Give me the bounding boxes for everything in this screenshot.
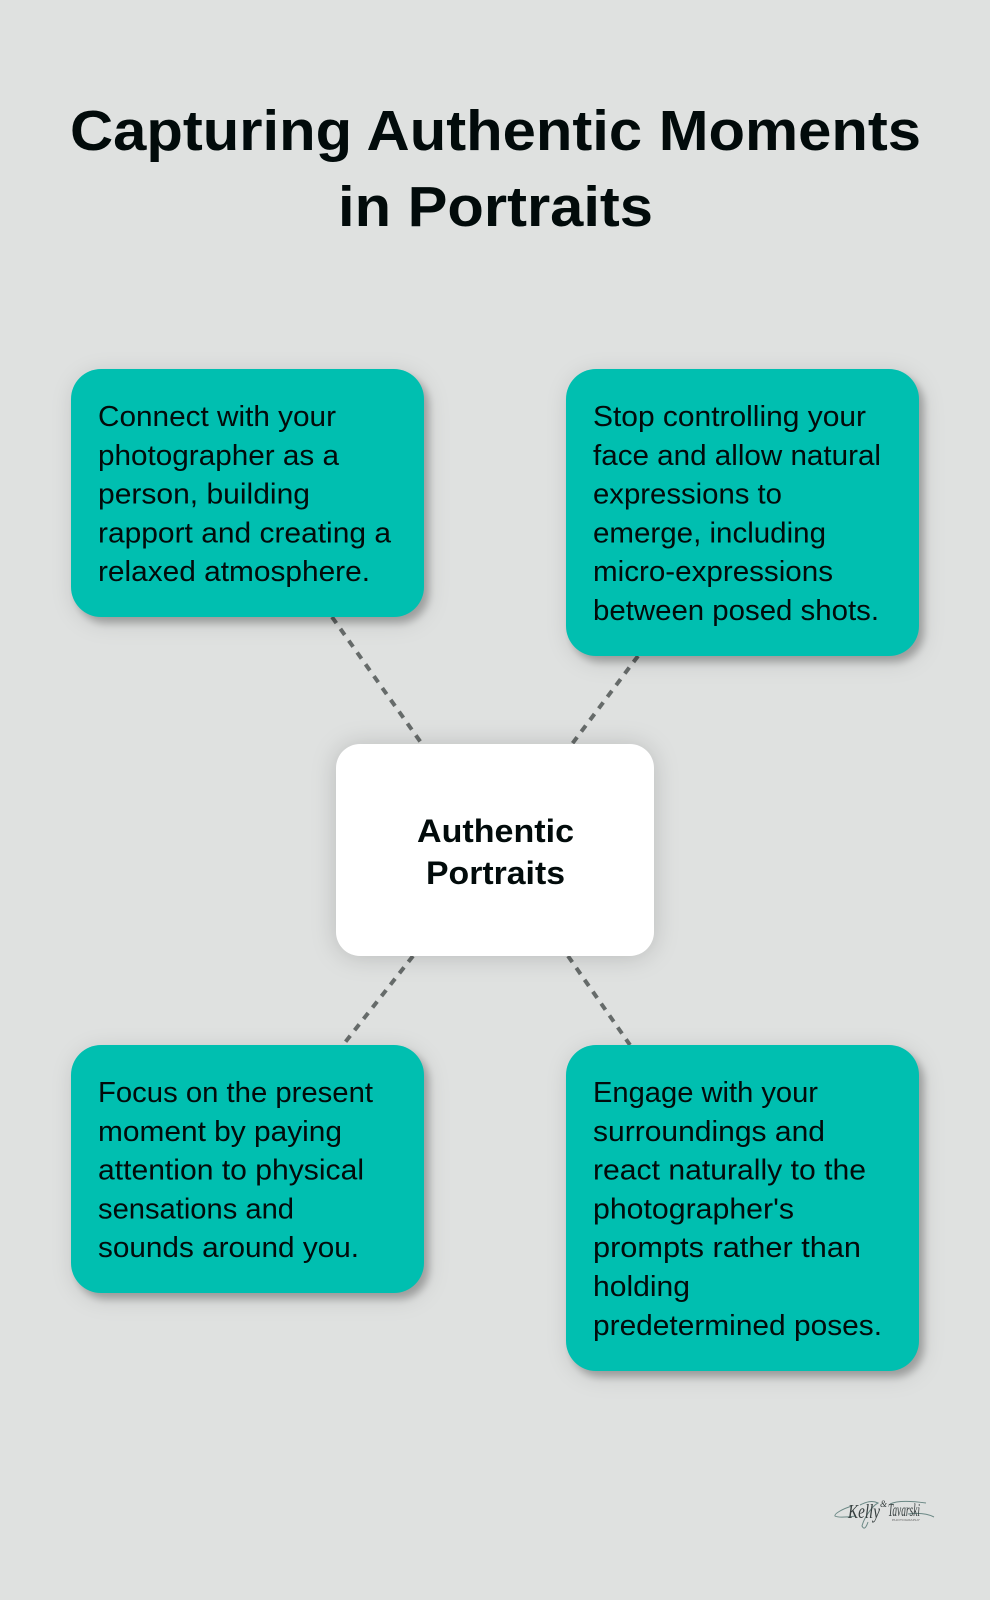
panel: engage with surroundings [566, 1045, 919, 1371]
panel: engage with surroundings: predetermined poses. [593, 1310, 882, 1342]
panel: center authentic portraits: Authentic [417, 813, 574, 849]
panel: engage with surroundings: holding [593, 1271, 690, 1303]
panel: engage with surroundings: photographer's [593, 1194, 794, 1226]
panel: engage with surroundings: surroundings and [593, 1116, 825, 1148]
panel: natural expressions: Stop controlling your [593, 401, 866, 433]
logo: signature: Kelly [847, 1501, 880, 1523]
panel: focus on present moment [71, 1045, 424, 1293]
connector: top right card to center [572, 656, 638, 744]
logo: signature: PHOTOGRAPHY [892, 1518, 920, 1522]
panel: natural expressions: between posed shots. [593, 595, 879, 627]
panel: connect with photographer: person, building [98, 478, 310, 510]
panel: focus on present moment: attention to physical [98, 1154, 364, 1186]
panel: center authentic portraits: Portraits [426, 855, 565, 891]
title: Capturing Authentic Moments [70, 99, 921, 163]
panel: natural expressions: micro-expressions [593, 556, 833, 588]
panel: connect with photographer [71, 369, 424, 617]
panel: focus on present moment: sounds around you. [98, 1232, 359, 1264]
panel: connect with photographer: photographer as a [98, 440, 340, 472]
connector: bottom left card to center [343, 956, 413, 1045]
panel: connect with photographer: rapport and creating a [98, 518, 392, 550]
panel: connect with photographer: Connect with your [98, 401, 336, 433]
panel: natural expressions: emerge, including [593, 518, 826, 550]
panel: focus on present moment: Focus on the present [98, 1077, 373, 1109]
logo: signature: & [880, 1499, 887, 1509]
panel: connect with photographer: relaxed atmosphere. [98, 556, 370, 588]
panel: natural expressions: face and allow natural [593, 440, 881, 472]
panel: natural expressions: expressions to [593, 478, 782, 510]
panel: natural expressions [566, 369, 919, 656]
panel: engage with surroundings: prompts rather than [593, 1232, 861, 1264]
title: in Portraits [338, 175, 653, 239]
panel: focus on present moment: sensations and [98, 1194, 294, 1226]
connector: top left card to center [332, 617, 422, 744]
logo: signature [835, 1499, 934, 1528]
title [70, 99, 921, 239]
connector: bottom right card to center [568, 956, 630, 1045]
panel: focus on present moment: moment by paying [98, 1116, 342, 1148]
panel: engage with surroundings: react naturally to the [593, 1154, 866, 1186]
logo: signature: Tavarski [888, 1500, 920, 1520]
panel: engage with surroundings: Engage with your [593, 1077, 818, 1109]
panel: center authentic portraits [336, 744, 654, 956]
